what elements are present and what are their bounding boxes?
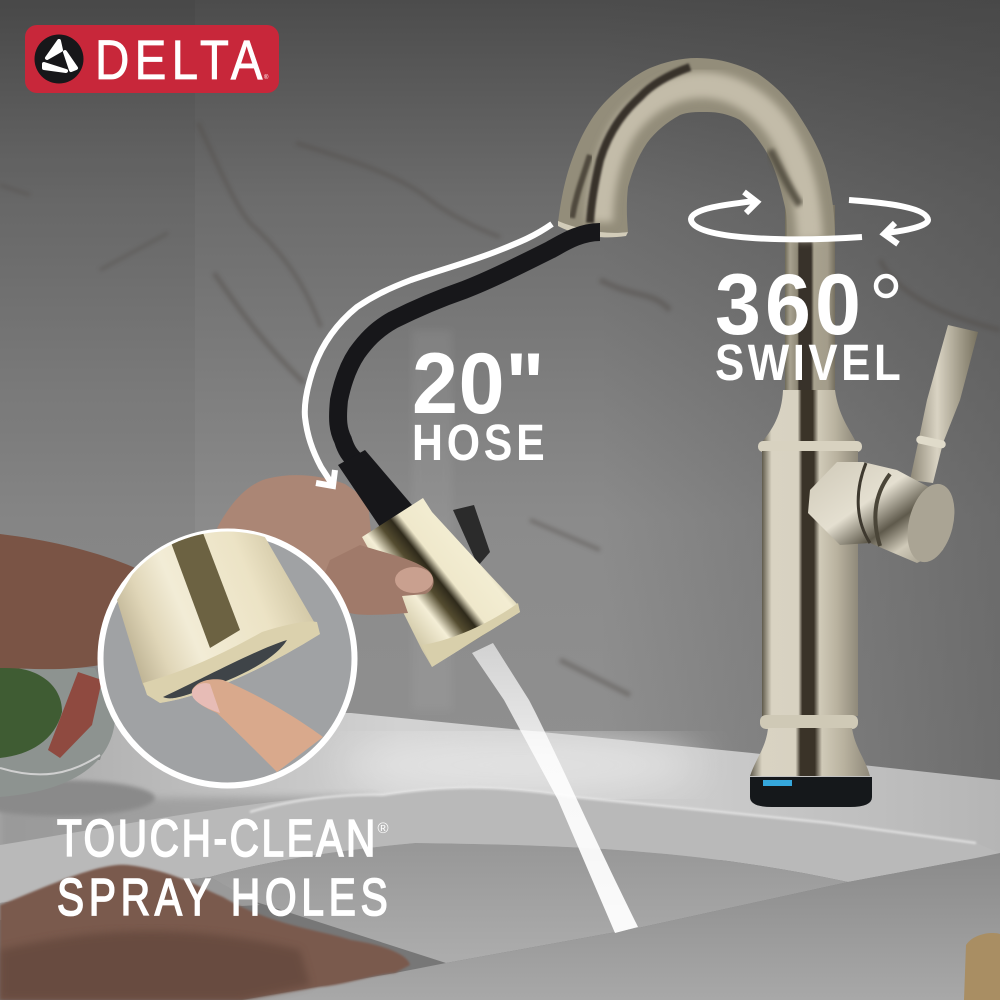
water stream [472, 643, 638, 933]
text: touch-clean spray holes: SPRAY HOLES [57, 868, 388, 926]
handle hub [808, 462, 953, 563]
bottom hand [0, 865, 410, 1000]
Delta logo: DELTA [95, 29, 263, 92]
inset spray holes [163, 640, 287, 698]
text: touch-clean spray holes: TOUCH-CLEAN [57, 809, 375, 867]
hose connector [338, 450, 412, 530]
spout arc [558, 58, 835, 240]
body column [762, 451, 858, 716]
faucet [558, 58, 978, 807]
handle face [900, 479, 962, 567]
spout mouth [558, 221, 628, 237]
bowl shadow [0, 780, 155, 816]
text: touch-clean spray holes: ® [377, 820, 389, 837]
inset sprayer body [117, 520, 320, 703]
neck transition reflection [770, 150, 800, 205]
Delta logo [25, 25, 279, 93]
blue LED [763, 780, 792, 786]
spout outer reflection [572, 155, 590, 218]
collar [758, 441, 862, 452]
spout highlight [600, 85, 810, 240]
hand shading [0, 931, 310, 1000]
sink basin [210, 843, 848, 963]
front counter [242, 853, 1000, 1000]
lower collar [760, 715, 858, 729]
upper flare [762, 390, 856, 442]
counter left shade [0, 795, 383, 860]
inset circle: touch-clean spray holes [100, 520, 354, 786]
inset fingernail [192, 683, 220, 713]
forearm [0, 534, 140, 669]
counter highlight [340, 737, 700, 793]
text: 360 degree swivel: 360 [715, 256, 861, 352]
text: 20 inch hose: 20" [412, 335, 544, 431]
text: 360 degree swivel: SWIVEL [715, 335, 901, 392]
wooden object [964, 933, 1000, 1000]
inset rim [143, 622, 320, 703]
base flare [750, 728, 870, 776]
hand palm [217, 475, 372, 610]
spout dark reflection [590, 67, 690, 223]
lever [910, 325, 978, 483]
counter top [0, 712, 1000, 860]
black base [750, 777, 872, 807]
inset dark stripe [170, 525, 240, 648]
sink side wall [0, 788, 1000, 903]
Delta logo: ® [264, 74, 269, 81]
text: touch-clean spray holes [57, 809, 389, 926]
swivel arrows [691, 192, 928, 244]
text: 360 degree swivel [715, 256, 901, 392]
text: 20 inch hose: HOSE [412, 413, 545, 471]
hose [338, 232, 600, 462]
hose arrow [305, 224, 552, 486]
spray head [362, 498, 520, 667]
left lower counter [0, 877, 260, 920]
sink rim highlight [250, 788, 976, 843]
background: marble wall [0, 0, 1000, 800]
bowl of salad [0, 668, 115, 797]
inset finger [192, 679, 323, 772]
neck [785, 205, 835, 395]
thumb and finger [318, 545, 434, 615]
